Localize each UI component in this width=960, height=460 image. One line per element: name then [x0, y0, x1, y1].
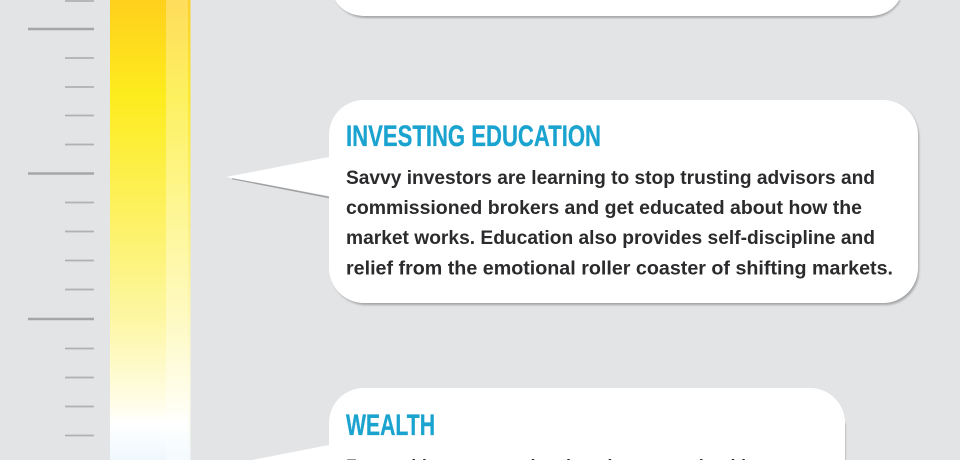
body text: commissioned brokers and get educated about how the: [346, 198, 862, 219]
scale tick marks: [28, 1, 94, 436]
body text: relief from the emotional roller coaster of shifting markets.: [346, 258, 893, 280]
body text: Savvy investors are learning to stop trusting advisors and: [346, 168, 875, 189]
heading: WEALTH: [346, 409, 435, 442]
bubble shape: [226, 100, 918, 303]
panel: top speech bubble (cropped): [335, 0, 900, 18]
bubble shadow: [331, 102, 919, 305]
panel: investing education bubble: [226, 100, 919, 305]
panel: wealth bubble (cropped): [252, 388, 846, 460]
body text: market works. Education also provides self-discipline and: [346, 228, 875, 249]
heading: INVESTING EDUCATION: [346, 120, 601, 153]
bubble shape with pointer: [252, 388, 845, 460]
thermometer gradient bar: [110, 0, 190, 460]
body text: [346, 168, 893, 280]
bubble shadow: [843, 423, 846, 460]
pointer shadow: [232, 178, 329, 198]
